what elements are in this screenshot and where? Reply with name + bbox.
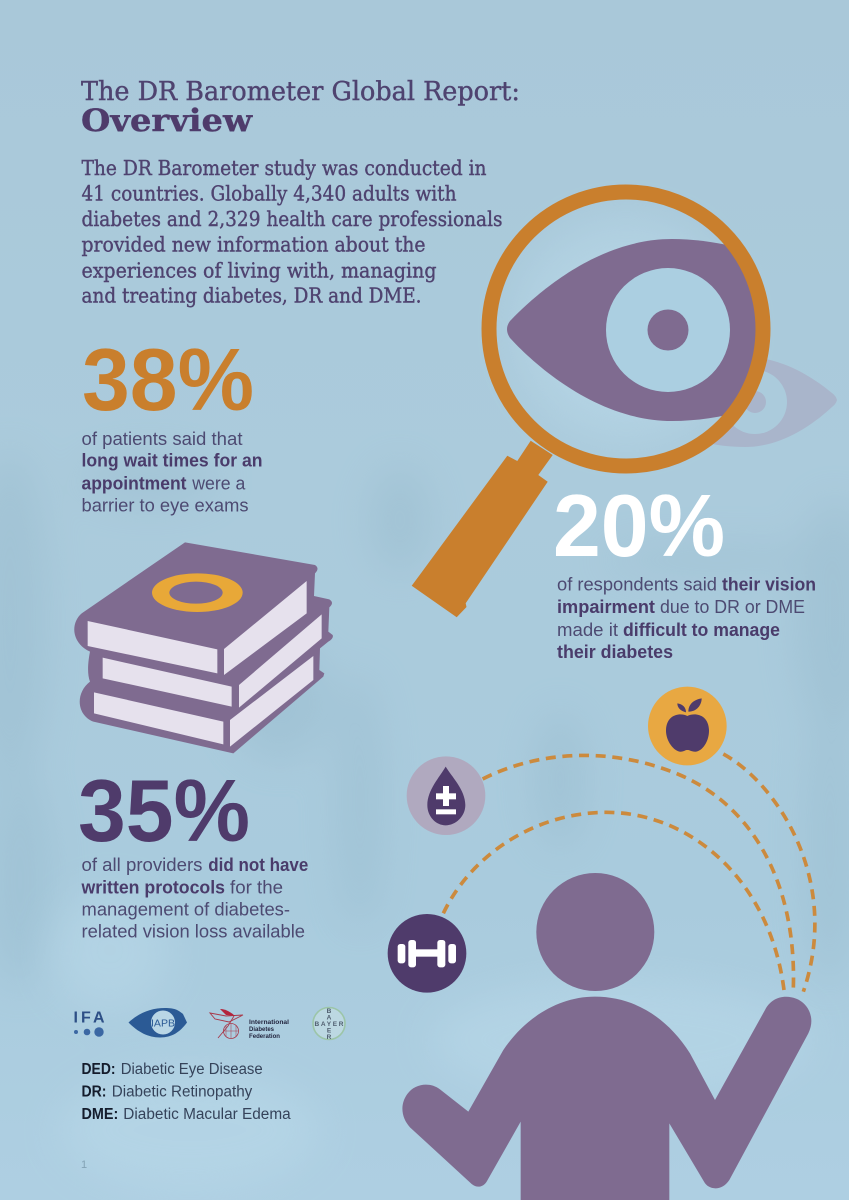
intro paragraph: experiences of living with, managing — [82, 258, 436, 282]
title: The DR Barometer Global Report: — [81, 77, 520, 107]
stat: 35%: 35% — [78, 761, 250, 860]
intro paragraph: and treating diabetes, DR and DME. — [82, 284, 422, 308]
logo: International Diabetes Federation: Diabetes — [249, 1026, 275, 1033]
stat: 20%: impairment — [557, 597, 655, 617]
stat: 20%: their vision — [722, 575, 816, 595]
stat: 38%: barrier to eye exams — [82, 496, 248, 516]
icon: faded eye behind magnifier — [714, 360, 837, 447]
stat: 38%: appointment — [82, 473, 186, 493]
stat: 35%: related vision loss available — [82, 922, 305, 942]
stat: 20%: made it — [557, 620, 618, 640]
stat: 38% — [82, 330, 262, 516]
stat: 38%: 38% — [82, 330, 254, 429]
icon: blood drop — [407, 756, 485, 835]
icon: stack of books — [74, 542, 333, 753]
abbreviations legend: DME: — [82, 1106, 118, 1123]
eye in lens — [507, 239, 770, 421]
logo: IFA: IFA — [74, 1010, 105, 1026]
magnifier ring — [489, 192, 763, 466]
logo: Bayer: R — [327, 1034, 332, 1041]
abbreviations legend — [82, 1061, 291, 1123]
title: Overview — [81, 103, 253, 139]
abbreviations legend: DR: — [82, 1084, 106, 1101]
intro paragraph: 41 countries. Globally 4,340 adults with — [82, 182, 456, 206]
logo: International Diabetes Federation: International — [249, 1019, 289, 1026]
logo: Bayer — [313, 1008, 345, 1041]
stat: 35%: management of diabetes- — [82, 900, 290, 920]
stat: 20%: 20% — [553, 476, 725, 575]
stat: 20%: difficult to manage — [623, 620, 780, 640]
stat: 35% — [78, 761, 308, 942]
stat: 20%: their diabetes — [557, 642, 673, 662]
abbreviations legend: DED: — [82, 1061, 116, 1078]
title — [81, 77, 520, 139]
stat: 38%: were a — [191, 473, 246, 493]
logo: IFA — [74, 1010, 105, 1037]
magnifier handle — [412, 441, 553, 617]
abbreviations legend: Diabetic Eye Disease — [121, 1061, 263, 1078]
stat: 20% — [553, 476, 816, 662]
dashed arcs — [443, 754, 815, 992]
intro paragraph: The DR Barometer study was conducted in — [82, 156, 486, 180]
logos row — [74, 1008, 345, 1041]
stat: 20%: of respondents said — [557, 575, 717, 595]
page number: 1 — [81, 1159, 87, 1171]
stat: 35%: of all providers — [82, 855, 202, 875]
intro paragraph: diabetes and 2,329 health care professionals — [82, 207, 502, 231]
stat: 20%: due to DR or DME — [660, 597, 805, 617]
intro paragraph: provided new information about the — [82, 233, 426, 257]
icon: apple — [648, 687, 727, 765]
stat: 38%: of patients said that — [82, 429, 242, 449]
logo: Bayer: BAYER — [314, 1021, 344, 1028]
logo: IAPB — [128, 1008, 187, 1038]
logo: International Diabetes Federation — [210, 1009, 289, 1040]
figure of a person — [402, 873, 811, 1200]
logo: International Diabetes Federation: Federation — [249, 1033, 280, 1040]
stat: 35%: written protocols — [81, 877, 225, 897]
icon: magnifying glass over eye — [412, 192, 770, 617]
logo: Bayer: A — [327, 1014, 332, 1022]
stat: 35%: did not have — [208, 855, 308, 875]
icon: dumbbell — [388, 914, 466, 993]
stat: 35%: for the — [230, 877, 283, 897]
logo: Bayer: B — [327, 1008, 332, 1015]
logo: IAPB: IAPB — [151, 1018, 175, 1030]
juggling icons and dashed arcs — [388, 687, 815, 993]
logo: Bayer: E — [327, 1028, 332, 1034]
abbreviations legend: Diabetic Macular Edema — [123, 1106, 291, 1123]
intro paragraph — [82, 156, 502, 308]
abbreviations legend: Diabetic Retinopathy — [112, 1084, 253, 1101]
stat: 38%: long wait times for an — [82, 451, 262, 471]
